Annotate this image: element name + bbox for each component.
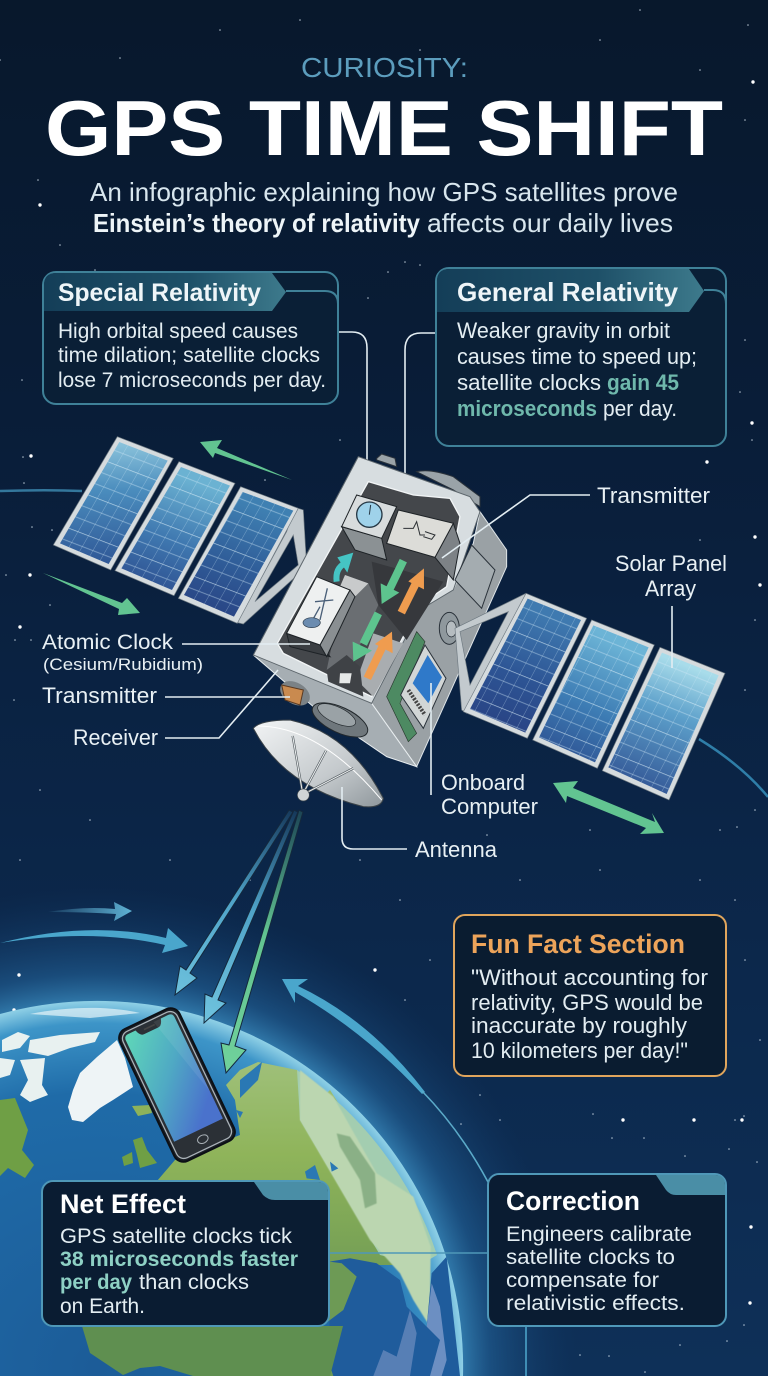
body text (60, 1224, 299, 1318)
eyebrow: CURIOSITY: (301, 52, 468, 83)
body text: GPS satellite clocks tick (60, 1224, 292, 1248)
heading: General Relativity (457, 277, 679, 307)
earth (0, 1001, 463, 1376)
body text (471, 965, 708, 1063)
subtitle line 2: affects our daily lives (427, 208, 673, 238)
strut (233, 507, 307, 624)
panel 2 (115, 462, 235, 596)
orbit lines (0, 490, 768, 797)
satellite labels: Solar Panel (615, 551, 727, 576)
panel 1 (53, 437, 173, 570)
right face (372, 512, 507, 767)
body text: on Earth. (60, 1294, 145, 1318)
strut (455, 593, 530, 713)
left solar array (53, 437, 307, 624)
front frame (253, 457, 480, 703)
corner tab (656, 1175, 725, 1195)
land: arctic islands (0, 1032, 100, 1102)
panel 2 (533, 620, 654, 768)
title block (45, 52, 723, 238)
heading: Correction (506, 1186, 640, 1216)
satellite labels: Receiver (73, 725, 158, 750)
heading: Special Relativity (58, 279, 261, 307)
side box (455, 545, 495, 608)
clock dial (357, 502, 382, 527)
receiver (276, 676, 314, 711)
body text: High orbital speed causes (58, 319, 298, 343)
satellite labels: Atomic Clock (42, 630, 173, 654)
satellite labels (42, 483, 727, 862)
body text: per day (60, 1270, 132, 1294)
panel: correction (488, 1174, 726, 1326)
heading: Net Effect (60, 1189, 186, 1219)
signal beams (175, 810, 303, 1073)
panel 1 (463, 593, 587, 738)
top fittings (377, 454, 480, 507)
satellite labels: Antenna (415, 837, 498, 862)
subtitle: An infographic explaining how GPS satellites prove (90, 177, 678, 207)
satellite labels: Computer (441, 794, 538, 819)
bottom face (253, 655, 417, 767)
body text: 10 kilometers per day!" (471, 1038, 688, 1063)
orbit arrows (0, 902, 526, 1376)
body text: "Without accounting for (471, 965, 708, 990)
panel 3 (602, 647, 725, 800)
arrow: upper green (200, 440, 292, 480)
atomic clock module (287, 577, 355, 657)
body text (506, 1222, 692, 1315)
body text: Weaker gravity in orbit (457, 318, 670, 343)
arrow: double green (553, 781, 664, 834)
interior cavity (277, 482, 460, 697)
heading: Fun Fact Section (471, 929, 685, 959)
phone screen (124, 1013, 223, 1142)
home button (196, 1133, 210, 1145)
body text: satellite clocks (457, 370, 601, 395)
panel: net effect (42, 1181, 329, 1326)
header tab (437, 269, 704, 312)
dish antenna (253, 720, 383, 807)
body text: relativistic effects. (506, 1291, 685, 1315)
panel: general relativity (436, 268, 726, 446)
onboard computer (387, 632, 446, 742)
header tab (44, 273, 286, 311)
phone (116, 1005, 238, 1165)
internal arrows (336, 553, 424, 678)
transmitter module (387, 510, 460, 580)
body text (457, 318, 697, 421)
lower light block (357, 633, 403, 697)
satellite leader lines (165, 495, 672, 849)
panel: fun fact (454, 915, 726, 1076)
body text: Engineers calibrate (506, 1222, 692, 1246)
land: americas (0, 1098, 34, 1178)
main title: GPS TIME SHIFT (45, 84, 723, 172)
body text: inaccurate by roughly (471, 1013, 687, 1038)
right solar array (455, 593, 725, 800)
satellite labels: Array (645, 576, 696, 601)
satellite labels: Transmitter (597, 483, 710, 508)
satellite labels: Onboard (441, 770, 525, 795)
interior wall (327, 575, 378, 670)
body text: relativity, GPS would be (471, 990, 703, 1015)
body text: 38 microseconds faster (60, 1247, 299, 1271)
body text: satellite clocks to (506, 1245, 675, 1269)
body text: gain 45 (607, 370, 679, 395)
land: britain (122, 1137, 157, 1168)
body text: than clocks (139, 1270, 249, 1294)
body text: microseconds (457, 396, 597, 421)
clock module (342, 495, 397, 560)
panel 3 (178, 487, 298, 623)
satellite body (253, 454, 507, 807)
body text: time dilation; satellite clocks (58, 343, 320, 367)
panel: special relativity (43, 272, 338, 404)
land: greenland (68, 1040, 133, 1122)
satellite labels: (Cesium/Rubidium) (43, 655, 203, 674)
interior dark compartment (372, 562, 443, 640)
satellite labels: Transmitter (42, 683, 157, 708)
land: africa (82, 1326, 343, 1376)
body text (58, 319, 326, 392)
body text: causes time to speed up; (457, 344, 697, 369)
connector lines from relativity panels (338, 332, 436, 520)
corner tab (254, 1182, 328, 1200)
body text: compensate for (506, 1268, 659, 1292)
mount ring (439, 612, 459, 644)
arrow: lower green (43, 573, 140, 615)
coastal band (297, 1070, 437, 1265)
pale land band (300, 1070, 460, 1376)
lower port (307, 696, 373, 744)
body text: lose 7 microseconds per day. (58, 368, 326, 392)
body text: per day. (603, 396, 677, 421)
land: eurasia (157, 1062, 340, 1265)
subtitle line 2: Einstein’s theory of relativity (93, 208, 420, 238)
